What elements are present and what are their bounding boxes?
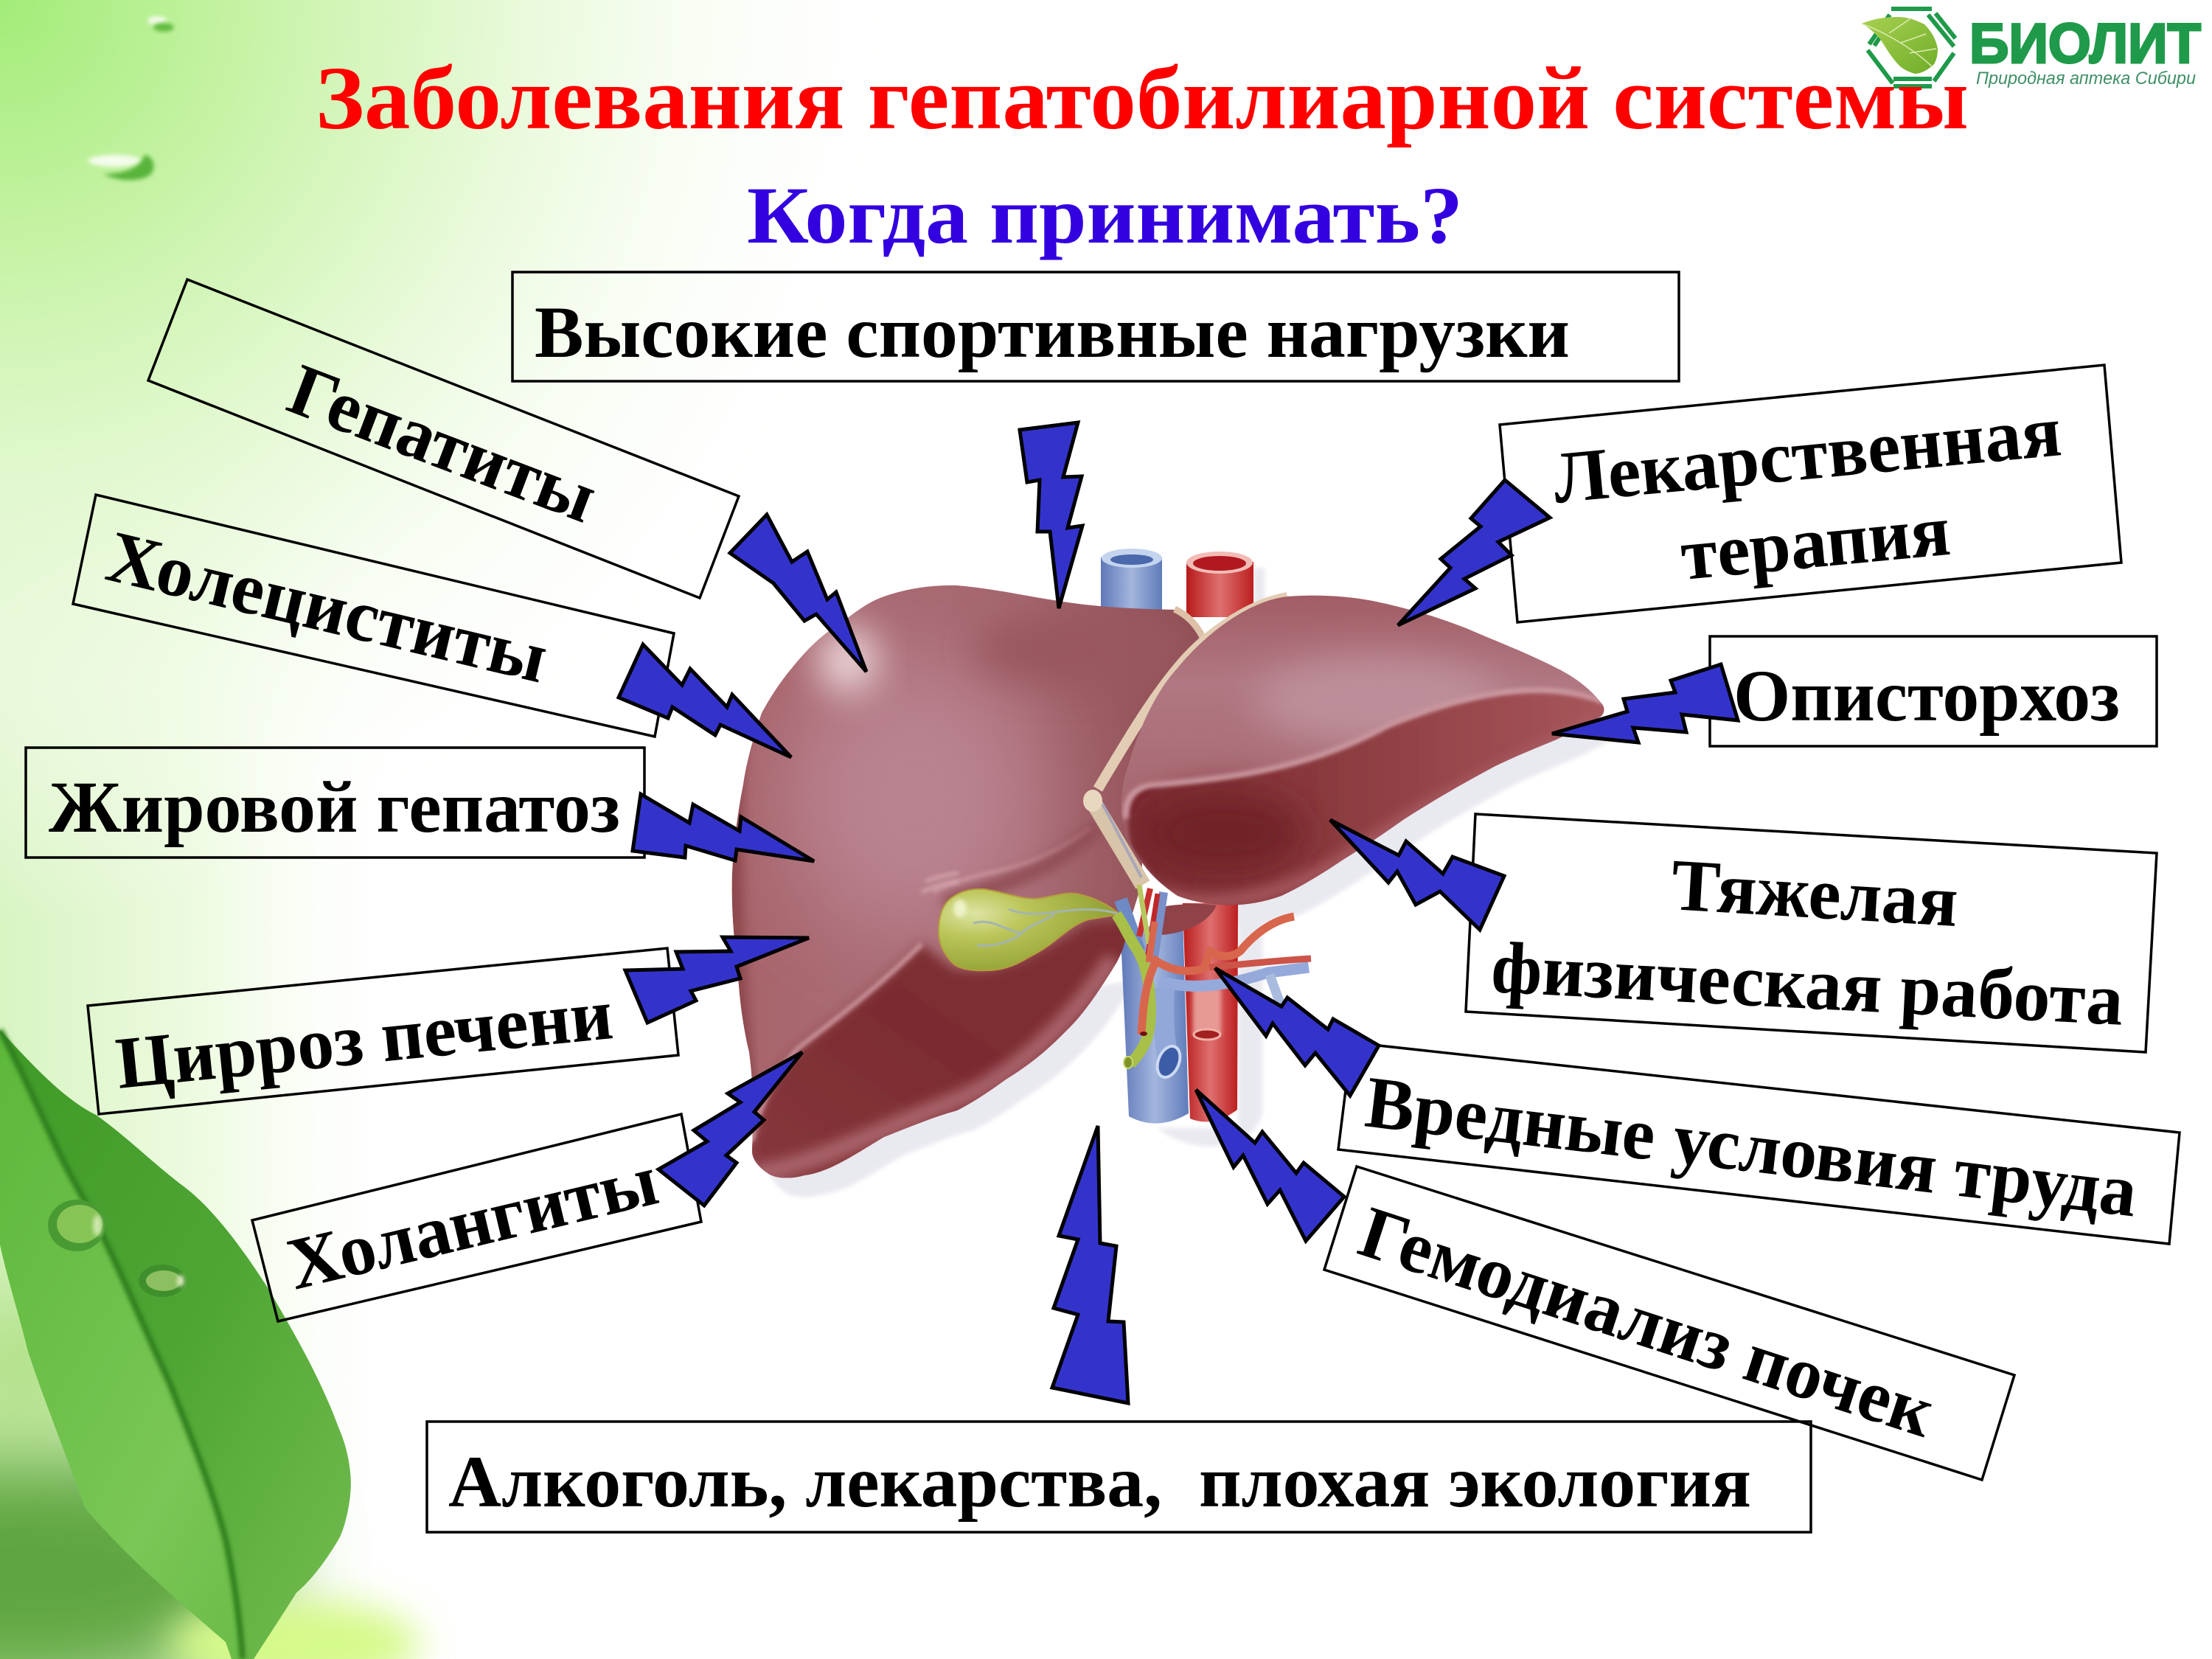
box: Описторхоз: Описторхоз bbox=[1733, 655, 2120, 737]
bolt: Холангиты bbox=[658, 1052, 802, 1206]
vena cava top stump bbox=[1101, 549, 1162, 613]
box: Цирроз печени bbox=[88, 948, 678, 1114]
vessel openings bbox=[1124, 1032, 1184, 1081]
liver illustration bbox=[723, 549, 1622, 1197]
box: Гепатиты bbox=[148, 279, 739, 598]
logo tagline: Природная аптека Сибири bbox=[1976, 69, 2196, 88]
arrows: lightning bolts bbox=[619, 422, 1738, 1403]
box: Холециститы bbox=[73, 495, 674, 737]
box: Описторхоз bbox=[1710, 636, 2157, 746]
box: Алкоголь, лекарства, плохая экология bbox=[427, 1422, 1811, 1532]
box: Лекарственная терапия: Лекарственная bbox=[1550, 389, 2065, 519]
drop one bbox=[48, 1200, 105, 1251]
box: Холангиты bbox=[252, 1114, 701, 1321]
inferior vena cava bbox=[1121, 914, 1189, 1124]
logo wordmark: БИОЛИТ bbox=[1969, 13, 2201, 75]
quadrate lobe ridge bbox=[933, 829, 1091, 891]
box: Алкоголь, лекарства, плохая экология: Алкоголь, лекарства, плохая экология bbox=[448, 1441, 1751, 1523]
falciform ligament bbox=[1083, 597, 1287, 885]
bolt: Цирроз печени bbox=[625, 937, 809, 1023]
box: Тяжелая физическая работа bbox=[1466, 814, 2157, 1052]
box: Высокие спортивные нагрузки bbox=[512, 272, 1679, 381]
gallbladder bbox=[939, 889, 1119, 970]
logo: Биолит bbox=[1862, 9, 2201, 88]
bolt: Холециститы bbox=[619, 644, 791, 757]
left lobe bbox=[1121, 596, 1604, 905]
bolt: Высокие спортивные нагрузки bbox=[1020, 422, 1082, 608]
box: Цирроз печени: Цирроз печени bbox=[112, 973, 616, 1105]
lower shaded surface bbox=[745, 918, 1139, 1187]
bolt: Гемодиализ почек bbox=[1196, 1090, 1344, 1241]
box: Холециститы: Холециститы bbox=[100, 515, 555, 699]
decorative leaf with water drops bbox=[0, 1030, 351, 1659]
bolt: Лекарственная терапия bbox=[1398, 480, 1550, 625]
box: Холангиты: Холангиты bbox=[279, 1138, 665, 1305]
box: Вредные условия труда: Вредные условия труда bbox=[1361, 1061, 2141, 1233]
abdominal aorta bbox=[1183, 903, 1238, 1121]
box: Гепатиты: Гепатиты bbox=[278, 348, 608, 538]
box: Гемодиализ почек: Гемодиализ почек bbox=[1350, 1190, 1944, 1453]
aorta top stump bbox=[1186, 552, 1253, 617]
bolt: Вредные условия труда bbox=[1215, 968, 1379, 1096]
gallbladder veins bbox=[973, 909, 1119, 946]
bolt: Гепатиты bbox=[730, 515, 866, 672]
hepatic caudate lobe bbox=[1161, 904, 1217, 935]
box: Лекарственная терапия bbox=[1500, 365, 2121, 622]
drop two bbox=[139, 1265, 186, 1297]
drop shadow bbox=[770, 568, 1622, 1197]
underside shaded surface bbox=[1128, 691, 1615, 914]
box: Жировой гепатоз: Жировой гепатоз bbox=[49, 766, 620, 848]
logo hexagon icon bbox=[1862, 9, 1955, 86]
bolt: Тяжелая физическая работа bbox=[1330, 820, 1504, 930]
aorta branch ostium bbox=[1193, 988, 1221, 1040]
right lobe bbox=[723, 575, 1224, 1187]
title: Заболевания гепатобилиарной системы bbox=[316, 49, 1969, 148]
subtitle: Когда принимать? bbox=[747, 170, 1463, 260]
bolt: Алкоголь, лекарства, плохая экология bbox=[1052, 1126, 1128, 1403]
box: Высокие спортивные нагрузки: Высокие спортивные нагрузки bbox=[535, 291, 1570, 373]
box: Тяжелая физическая работа: Тяжелая bbox=[1669, 844, 1961, 942]
hilar vessels bbox=[1116, 885, 1311, 1066]
box: Тяжелая физическая работа: физическая работа bbox=[1489, 926, 2125, 1041]
box: Лекарственная терапия: терапия bbox=[1677, 489, 1953, 596]
bolt: Жировой гепатоз bbox=[633, 794, 814, 861]
bolt: Описторхоз bbox=[1552, 664, 1738, 742]
box: Жировой гепатоз bbox=[26, 748, 644, 858]
